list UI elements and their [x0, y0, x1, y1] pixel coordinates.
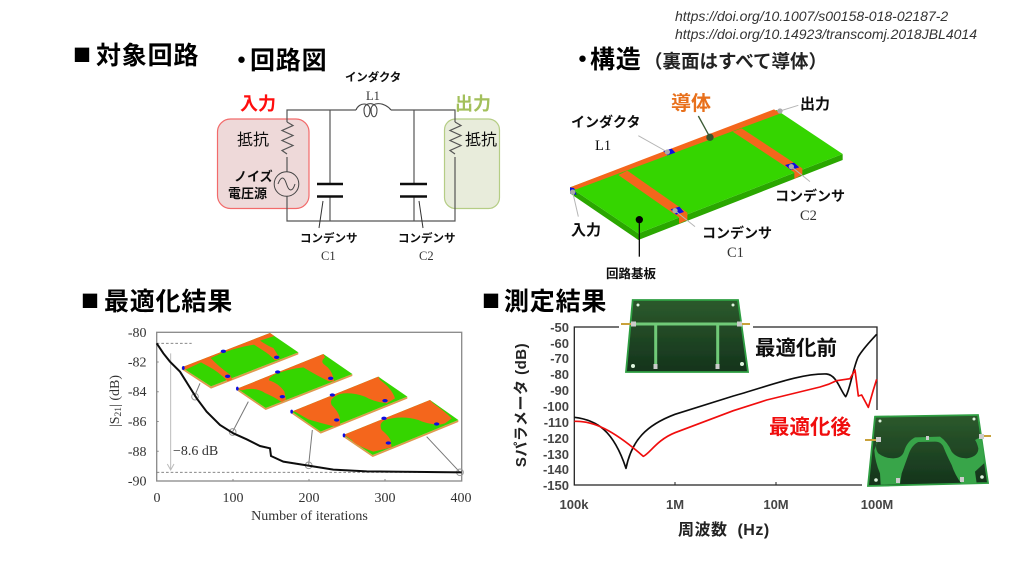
board insets 1 and 2: [182, 333, 352, 410]
before label: 最適化前: [755, 337, 837, 360]
x axis labels: 1M: [666, 497, 684, 512]
mount holes: [874, 418, 984, 482]
capacitor C2: [400, 184, 427, 196]
y axis title: Sパラメータ (dB): [513, 343, 530, 467]
C1 label: C1: [727, 245, 744, 261]
photo: board after optimization: [862, 411, 994, 491]
x axis labels: 100M: [861, 497, 893, 512]
output shaded box: [444, 119, 500, 208]
inductor label: インダクタ: [571, 114, 640, 130]
y axis labels: -86: [128, 415, 146, 430]
heading: target circuit: 対象回路: [96, 36, 199, 72]
capacitor C1: [317, 184, 343, 196]
citation links: https://doi.org/10.1007/s00158-018-02187-2: [675, 8, 948, 24]
x axis labels: 10M: [763, 497, 789, 512]
y axis labels: -90: [550, 383, 569, 398]
board inset 2: [236, 354, 352, 410]
board top: [570, 110, 843, 233]
y axis title: 21: [114, 407, 124, 416]
y axis labels: [543, 320, 569, 493]
connectors: [621, 323, 750, 325]
y axis labels: -110: [544, 415, 569, 430]
output resistor label: 抵抗: [465, 131, 497, 149]
y axis labels: -82: [128, 356, 146, 370]
citation links: [675, 8, 977, 42]
heading: structure: [570, 40, 827, 76]
noise voltage source: [274, 172, 299, 196]
C2 name: コンデンサ: [775, 188, 845, 204]
board insets 3 and 4: [290, 377, 458, 457]
citation links: https://doi.org/10.14923/transcomj.2018JBL4014: [675, 26, 977, 42]
after optimization curve: [574, 370, 877, 456]
input resistor label: 抵抗: [237, 131, 269, 149]
y axis labels: -50: [550, 320, 569, 335]
C2 label: C2: [800, 208, 817, 224]
heading: measurement result: ■: [482, 288, 500, 314]
C1 name: コンデンサ: [300, 231, 358, 245]
heading: structure: ・: [570, 40, 596, 76]
y axis labels: [128, 326, 146, 490]
photo: board before optimization: [619, 296, 753, 378]
output label: 出力: [455, 94, 491, 114]
x axis title: 周波数 (Hz): [678, 521, 770, 539]
inductor label: インダクタ: [345, 70, 401, 84]
heading: measurement result: 測定結果: [504, 282, 607, 318]
board label: 回路基板: [606, 266, 657, 281]
panel: circuit diagram: [218, 70, 500, 263]
C1 label: C1: [321, 249, 336, 263]
y axis labels: -80: [550, 367, 569, 382]
blue pads: [570, 149, 799, 215]
heading: circuit diagram: 回路図: [250, 41, 327, 77]
input label: 入力: [571, 222, 601, 239]
leader lines: [194, 383, 460, 472]
sample markers: [192, 393, 463, 476]
input shaded box: [218, 119, 309, 208]
photo halo: [862, 411, 994, 491]
heading: optimization result: ■: [81, 288, 99, 314]
x axis labels: [154, 491, 472, 506]
L1 label: L1: [595, 138, 611, 154]
noise source label: 電圧源: [228, 186, 267, 201]
x axis title: Number of iterations: [251, 509, 368, 524]
difference arrow: [167, 353, 174, 470]
x axis labels: 100: [222, 491, 244, 506]
y axis title: |S: [108, 416, 123, 427]
heading: circuit diagram: ・: [229, 41, 255, 77]
y axis labels: -84: [128, 385, 146, 400]
board side: [570, 154, 843, 240]
capacitor leader lines: [319, 201, 423, 228]
x axis labels: 400: [450, 491, 472, 506]
noise source label: ノイズ: [234, 169, 273, 184]
board body: [626, 300, 748, 372]
y axis labels: -150: [543, 478, 569, 493]
C1 name: コンデンサ: [702, 225, 772, 241]
chart: optimization iterations: [108, 326, 472, 524]
input label: 入力: [240, 94, 276, 114]
dashed reference lines: [157, 343, 462, 472]
y axis labels: -88: [128, 445, 146, 460]
convergence curve: [157, 343, 462, 472]
y axis title: | (dB): [108, 375, 123, 407]
panel: board structure: [570, 91, 845, 281]
traces: [634, 324, 738, 366]
board inset 4: [343, 400, 458, 457]
connectors: [865, 436, 991, 440]
heading: structure: 構造: [590, 40, 642, 76]
y axis labels: -80: [128, 326, 146, 341]
plot frame: [157, 332, 462, 481]
grey leader lines and dots: [570, 105, 810, 227]
circuit board 3D drawing: [570, 105, 843, 257]
y axis labels: -130: [543, 447, 569, 462]
heading: optimization result: 最適化結果: [104, 282, 233, 318]
difference value: −8.6 dB: [173, 444, 218, 459]
C2 label: C2: [419, 249, 434, 263]
y axis labels: -60: [550, 336, 569, 351]
photo halo: [619, 296, 753, 378]
plot contents: [157, 343, 463, 476]
after label: 最適化後: [769, 416, 851, 439]
curves: [574, 334, 877, 468]
y axis labels: -120: [543, 431, 569, 446]
x axis labels: 200: [298, 491, 320, 506]
optimized conductor: [874, 437, 984, 485]
mount holes: [631, 304, 744, 368]
conductor pointer: [698, 116, 710, 137]
y axis labels: -100: [543, 399, 569, 414]
board inset 1: [182, 333, 298, 389]
x axis labels: 0: [154, 491, 160, 506]
circuit wiring: [282, 110, 461, 221]
y axis labels: -90: [128, 474, 146, 490]
tick marks: [157, 362, 385, 481]
x axis labels: [560, 497, 893, 512]
tick marks: [675, 482, 776, 485]
inductor L1: [356, 104, 391, 117]
board inset 3: [290, 377, 407, 434]
conductor traces: [570, 109, 802, 224]
y axis labels: -70: [550, 351, 569, 366]
x axis labels: 300: [374, 491, 396, 506]
before optimization curve: [574, 334, 877, 468]
C2 name: コンデンサ: [398, 231, 456, 245]
conductor label: 導体: [671, 91, 711, 115]
output label: 出力: [800, 96, 830, 113]
L1 label: L1: [366, 89, 380, 103]
x axis labels: 100k: [560, 497, 589, 512]
board body: [868, 415, 988, 486]
chart: S parameter measurement: [513, 320, 893, 539]
y axis labels: -140: [543, 462, 569, 477]
heading: structure: （裏面はすべて導体）: [644, 48, 827, 74]
axes: [574, 327, 877, 485]
board pointer: [637, 220, 641, 257]
heading: target circuit: ■: [73, 42, 91, 68]
